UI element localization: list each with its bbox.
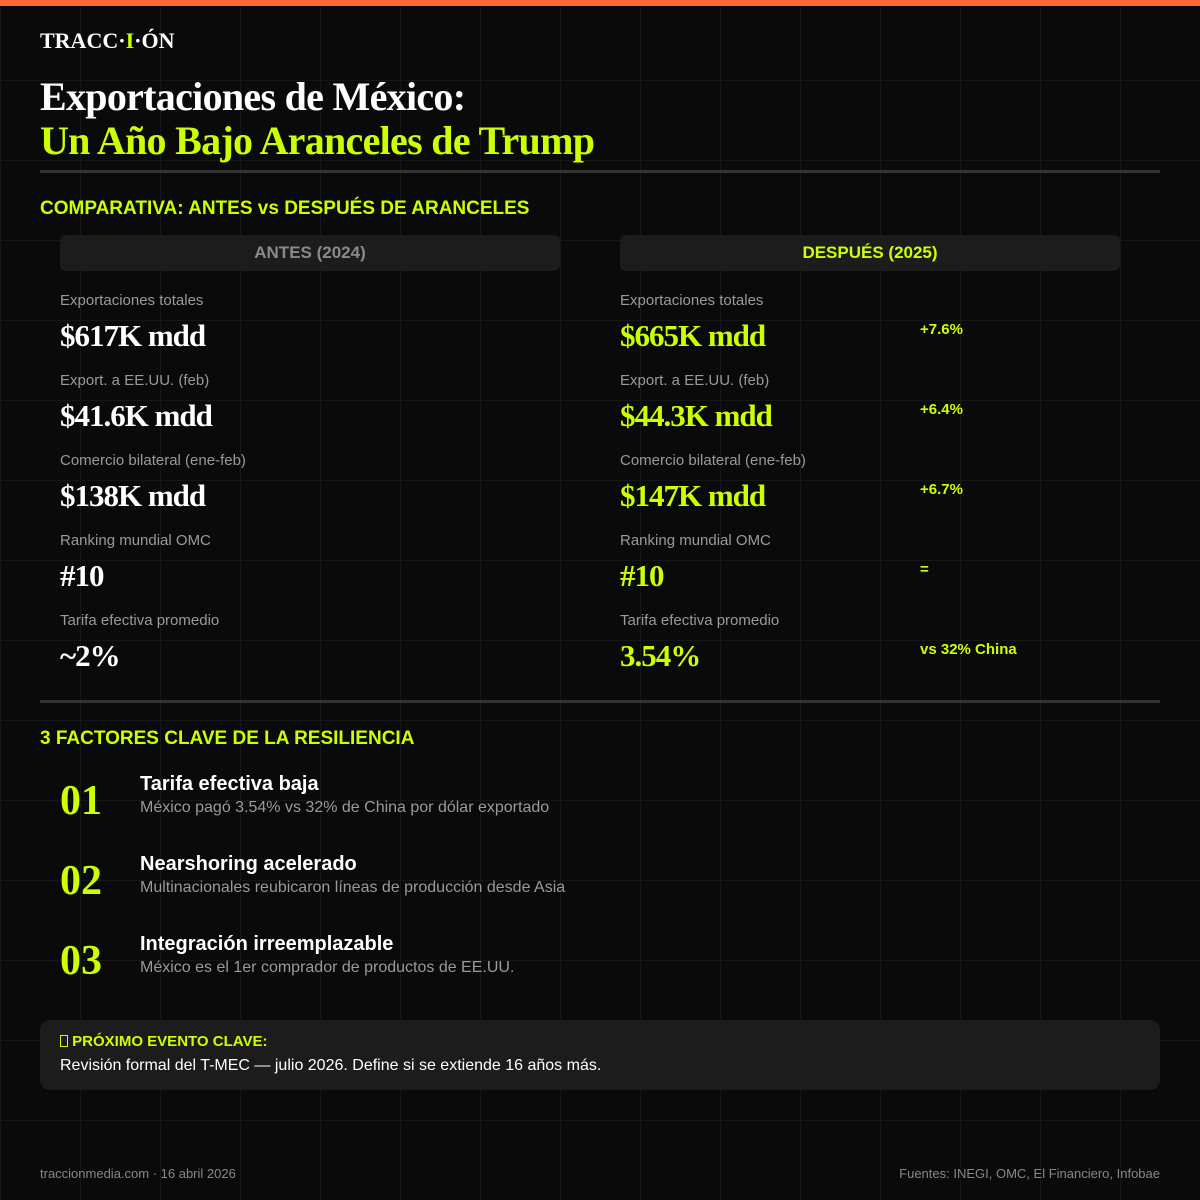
panel: antes: Ranking mundial OMC [60,532,211,549]
title: Un Año Bajo Aranceles de Trump [40,118,594,163]
callout: proximo evento: Revisión formal del T-MEC — julio 2026. Define si se extiende 16 años más. [60,1057,601,1074]
top accent bar [0,0,1200,6]
section heading: comparativa: COMPARATIVA: ANTES vs DESPUÉS DE ARANCELES [40,198,529,219]
panel: despues: 3.54% [620,638,700,673]
factor 03: México es el 1er comprador de productos de EE.UU. [140,959,514,976]
panel: despues: Tarifa efectiva promedio [620,612,779,629]
section heading: factores: 3 FACTORES CLAVE DE LA RESILIENCIA [40,728,414,749]
callout: proximo evento: PRÓXIMO EVENTO CLAVE: [72,1033,267,1050]
panel: despues: Ranking mundial OMC [620,532,771,549]
panel: despues: +7.6% [920,321,963,338]
logo: TRACC·I·ÓN [40,28,174,53]
panel: antes: #10 [60,558,104,593]
factor 02: Multinacionales reubicaron líneas de producción desde Asia [140,879,565,896]
factor 01: México pagó 3.54% vs 32% de China por dólar exportado [140,799,549,816]
panel: despues: vs 32% China [920,641,1017,658]
factor 01 [60,773,549,824]
panel: despues: Exportaciones totales [620,292,763,309]
panel: antes: $41.6K mdd [60,398,212,433]
panel: antes: Exportaciones totales [60,292,203,309]
factor 02 [60,853,566,904]
panel: despues: Comercio bilateral (ene-feb) [620,452,806,469]
factor 03: 03 [60,938,102,984]
panel: despues: #10 [620,558,664,593]
panel: despues: $665K mdd [620,318,765,353]
factor 03: Integración irreemplazable [140,933,393,955]
panel: despues: Export. a EE.UU. (feb) [620,372,769,389]
header despues: DESPUÉS (2025) [802,243,938,262]
panel: antes [60,235,560,673]
panel: antes: ~2% [60,638,120,673]
footer left: traccionmedia.com · 16 abril 2026 [40,1166,236,1181]
header despues [620,235,1120,271]
callout: proximo evento [40,1020,1160,1090]
panel: despues: = [920,561,929,578]
panel: despues: +6.4% [920,401,963,418]
factor 02: Nearshoring acelerado [140,853,357,875]
factor 03 [60,933,514,984]
footer right: Fuentes: INEGI, OMC, El Financiero, Infobae [899,1166,1160,1181]
factor 02: 02 [60,858,102,904]
panel: despues [620,235,1120,673]
panel: despues: +6.7% [920,481,963,498]
panel: antes: $617K mdd [60,318,205,353]
panel: antes: Export. a EE.UU. (feb) [60,372,209,389]
panel: despues: $147K mdd [620,478,765,513]
factor 01: 01 [60,778,102,824]
panel: antes: Comercio bilateral (ene-feb) [60,452,246,469]
title: Exportaciones de México: [40,74,465,119]
factor 01: Tarifa efectiva baja [140,773,319,795]
header antes: ANTES (2024) [254,243,366,262]
panel: despues: $44.3K mdd [620,398,772,433]
panel: antes: Tarifa efectiva promedio [60,612,219,629]
panel: antes: $138K mdd [60,478,205,513]
header antes [60,235,560,271]
title [40,74,594,163]
